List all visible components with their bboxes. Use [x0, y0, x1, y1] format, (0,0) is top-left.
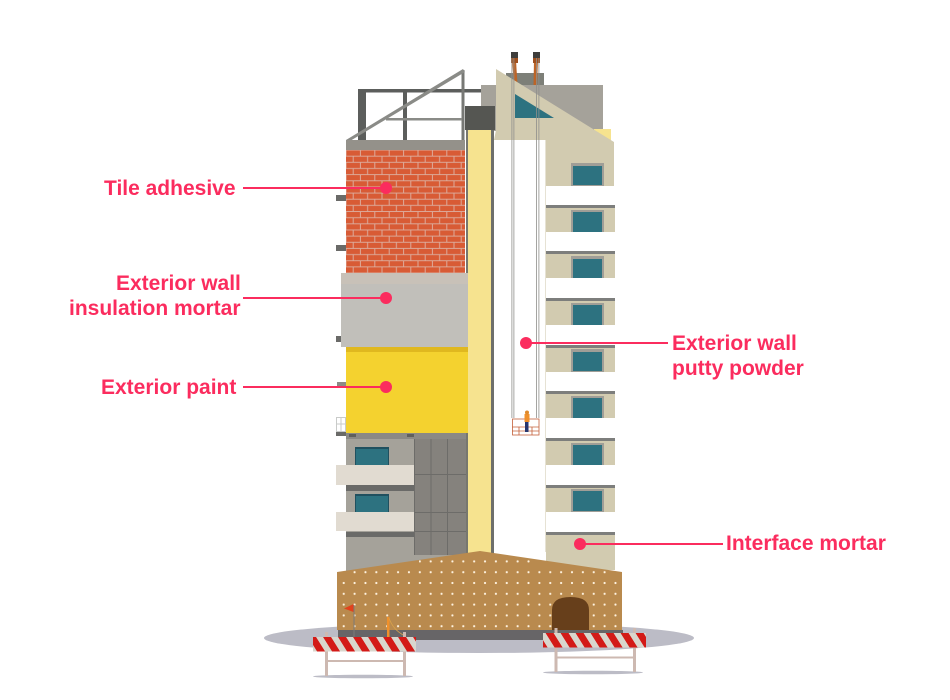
small yellow roof piece — [594, 129, 611, 141]
parapet — [346, 140, 465, 150]
hoarding dots — [338, 556, 620, 631]
grey facade panels — [414, 439, 466, 555]
lower left balconies — [336, 465, 414, 537]
illustration: building cross-section — [264, 52, 694, 678]
callout: exterior wall putty powder: putty powder — [672, 357, 804, 380]
ground shadow — [264, 623, 694, 653]
work platform with worker — [512, 410, 539, 435]
callout: tile adhesive: Tile adhesive — [104, 177, 236, 200]
callout: interface mortar: Interface mortar — [726, 532, 886, 555]
right road barrier — [543, 628, 646, 674]
left wall ledges — [336, 195, 346, 436]
right tower windows — [571, 163, 604, 512]
rooftop small block — [506, 73, 544, 85]
central dark cap — [465, 106, 495, 130]
callout: interface mortar — [574, 532, 886, 555]
callout: exterior paint — [101, 376, 392, 399]
platform cradle — [512, 419, 539, 435]
balcony ladder — [336, 417, 346, 432]
suspension ropes — [512, 58, 539, 418]
right tower roof gable — [494, 69, 614, 186]
callout: tile adhesive — [104, 177, 392, 200]
hoarding door — [552, 597, 589, 630]
callout: exterior wall putty powder: Exterior wall — [672, 332, 797, 355]
worker — [524, 410, 530, 432]
left road barrier — [313, 632, 416, 678]
roof railing frame — [346, 69, 482, 141]
callout: exterior wall insulation mortar: Exterior wall — [116, 272, 241, 295]
lower left wall — [346, 433, 466, 573]
warning flag — [344, 604, 354, 638]
callout: exterior wall insulation mortar: insulation mortar — [69, 297, 241, 320]
chimney pipes — [511, 52, 540, 85]
callout: exterior wall putty powder — [520, 332, 804, 380]
panel: insulation mortar wall — [341, 273, 468, 347]
callout: exterior paint: Exterior paint — [101, 376, 236, 399]
foundation hoarding — [337, 551, 623, 640]
central yellow column — [466, 130, 494, 555]
orange post with rope — [387, 617, 405, 638]
panel: brick wall — [346, 150, 465, 273]
right tower floors — [545, 140, 615, 570]
panel: yellow painted wall — [346, 347, 468, 433]
rear roof block — [481, 85, 603, 131]
callout: exterior wall insulation mortar — [69, 272, 392, 320]
lower left windows — [355, 447, 389, 513]
gable triangular window — [515, 94, 554, 118]
